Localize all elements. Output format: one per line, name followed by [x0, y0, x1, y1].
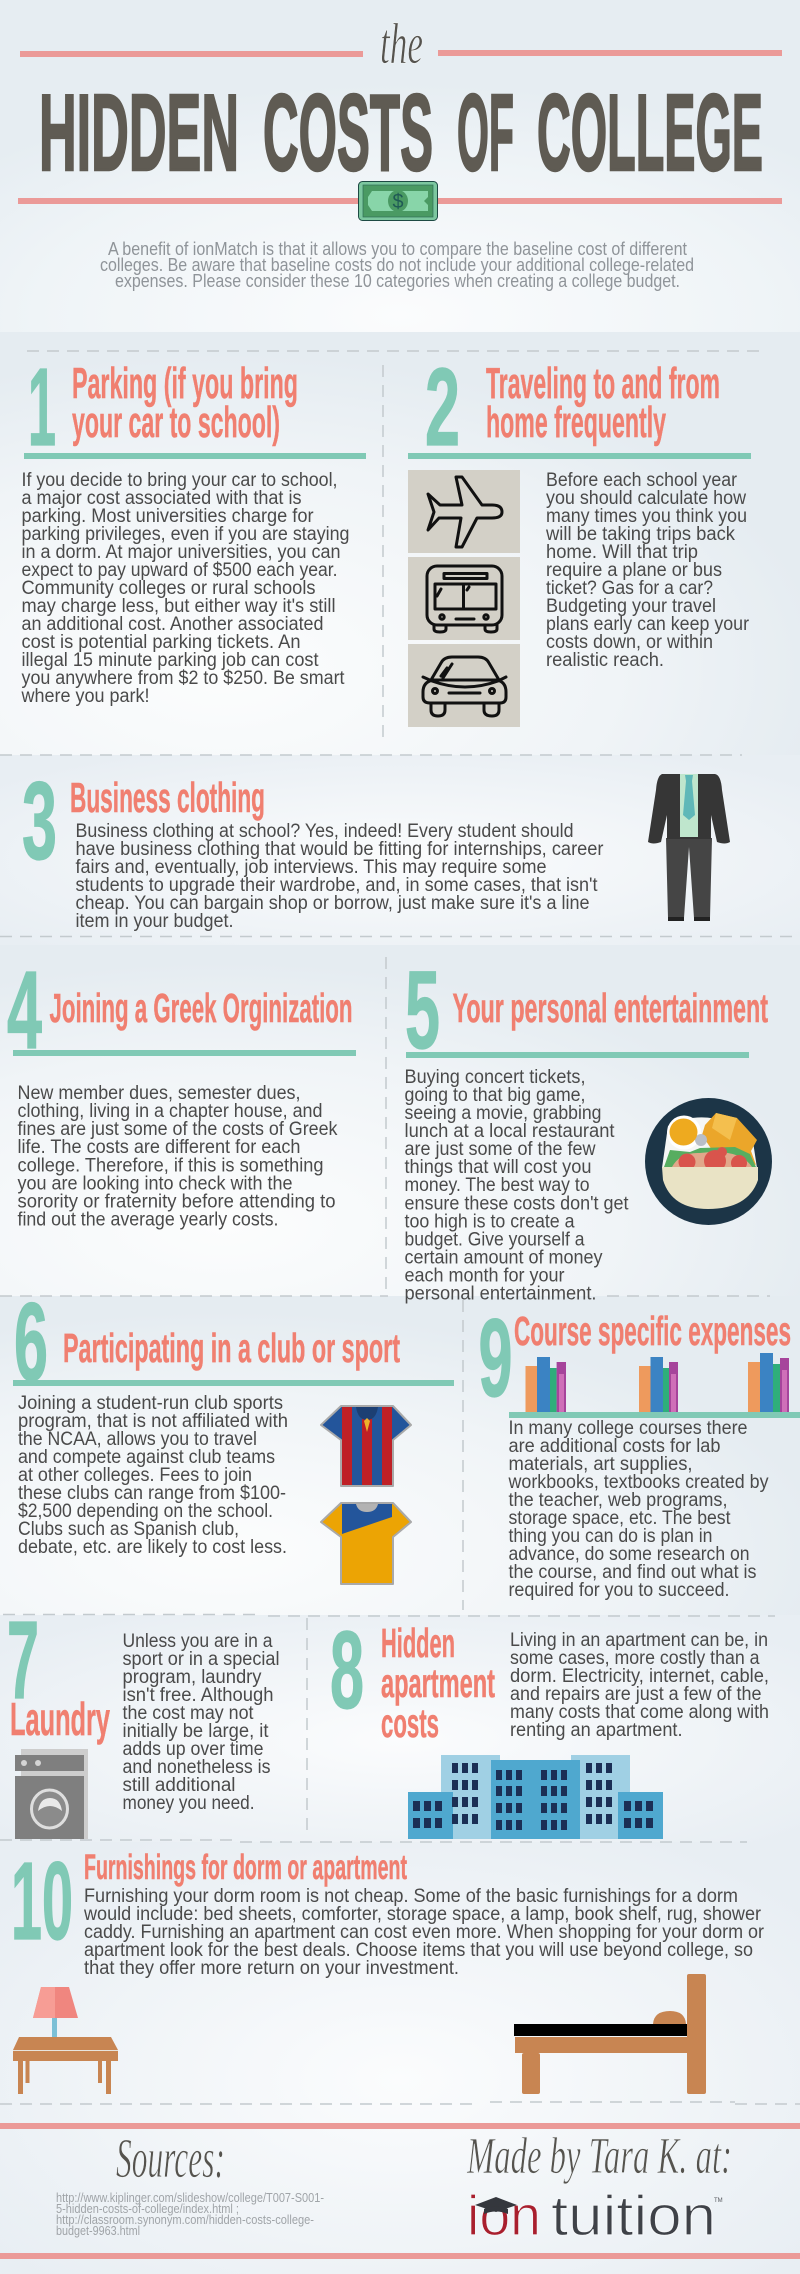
text: club body	[18, 1393, 288, 1558]
text: traveling body: ticket? Gas for a car?	[546, 578, 713, 599]
heading: traveling	[486, 359, 720, 447]
panel: 7 laundry	[7, 1599, 280, 1839]
heading: furnishings: Furnishings for dorm or apartment	[84, 1848, 407, 1887]
text: entertainment body	[404, 1067, 629, 1304]
icon: apartment buildings	[408, 1755, 663, 1839]
intro text: expenses. Please consider these 10 categories when creating a college budget.	[115, 270, 680, 291]
title	[39, 72, 763, 194]
text: course body: required for you to succeed.	[508, 1580, 730, 1601]
text: greek body: life. The costs are different for each	[18, 1137, 300, 1158]
text: entertainment body: seeing a movie, grabbing	[404, 1103, 602, 1124]
text: apartment body: renting an apartment.	[510, 1720, 682, 1741]
text: laundry body: and nonetheless is	[122, 1757, 270, 1778]
text: greek body	[18, 1083, 338, 1230]
logo: iontuition	[467, 2184, 723, 2248]
text: entertainment body: each month for your	[404, 1266, 565, 1286]
number 4: 4	[7, 949, 42, 1072]
sources links: http://www.kiplinger.com/slideshow/college/T007-S001-	[56, 2191, 324, 2205]
text: course body: materials, art supplies,	[508, 1454, 692, 1475]
text: course body: the teacher, web programs,	[508, 1490, 728, 1511]
text: parking body: an additional cost. Another associated	[22, 614, 324, 635]
text: apartment body: and repairs are just a few of the	[510, 1684, 762, 1705]
heading: apartment	[381, 1620, 495, 1746]
footer	[0, 2123, 800, 2259]
number 3: 3	[22, 760, 57, 883]
text: apartment body: some cases, more costly than a	[510, 1648, 760, 1669]
icon: bus	[408, 557, 520, 640]
text: club body: $2,500 depending on the school.	[18, 1501, 273, 1522]
number 2: 2	[425, 346, 460, 469]
icon: dollar bill: $	[392, 191, 404, 213]
text: parking body: illegal 15 minute parking job can cost	[22, 650, 319, 671]
text: greek body: fines are just some of the costs of Greek	[18, 1119, 338, 1140]
icon: striped jersey	[321, 1406, 411, 1486]
text: laundry body: the cost may not	[122, 1703, 254, 1724]
text: business clothing body: students to upgrade their wardrobe, and, in some cases, that isn't	[76, 875, 598, 896]
icon: lamp on table	[13, 1987, 118, 2094]
icon: plane	[408, 470, 520, 553]
number 8: 8	[330, 1609, 364, 1732]
heading: apartment: Hidden	[381, 1620, 455, 1666]
number 9: 9	[478, 1297, 512, 1420]
icon: car	[408, 644, 520, 727]
heading: greek: Joining a Greek Orginization	[50, 985, 352, 1031]
text: business clothing body: item in your budget.	[76, 911, 234, 932]
sources links: 5-hidden-costs-of-college/index.html ;	[56, 2202, 239, 2216]
panel: 2 traveling	[408, 346, 751, 727]
text: apartment body: many costs that come along with	[510, 1702, 769, 1723]
logo: iontuition: TM	[714, 2198, 723, 2204]
heading: parking: Parking (if you bring	[72, 359, 298, 408]
intro text: A benefit of ionMatch is that it allows you to compare the baseline cost of different	[108, 238, 687, 259]
text: traveling body: Before each school year	[546, 470, 738, 491]
sources links: http://classroom.synonym.com/hidden-costs-college-	[56, 2213, 314, 2227]
text: entertainment body: going to that big game,	[404, 1085, 586, 1106]
text: course body: are additional costs for lab	[508, 1436, 720, 1457]
text: apartment body	[510, 1630, 769, 1741]
text: entertainment body: money. The best way to	[404, 1175, 590, 1196]
script word: the: the	[380, 11, 423, 76]
text: parking body: where you park!	[21, 686, 150, 707]
text: laundry body: sport or in a special	[122, 1649, 280, 1670]
text: entertainment body: lunch at a local restaurant	[404, 1121, 615, 1142]
panel: 1 parking: 1	[28, 346, 56, 469]
text: business clothing body: have business clothing that would be fitting for internships, career	[76, 839, 604, 860]
sources links	[56, 2191, 324, 2238]
text: business clothing body	[76, 821, 604, 932]
text: furnishings body: caddy. Furnishing an apartment can cost even more. When shopping for your dorm or	[84, 1922, 765, 1943]
heading: apartment: apartment	[381, 1660, 495, 1706]
text: parking body: parking. Most universities charge for	[22, 506, 314, 527]
text: apartment body: dorm. Electricity, internet, cable,	[510, 1666, 769, 1687]
text: parking body: in a dorm. At major universities, you can	[22, 542, 340, 563]
text: parking body: If you decide to bring your car to school,	[22, 470, 338, 491]
panel: 10 furnishings	[11, 1840, 765, 2094]
text: entertainment body: budget. Give yourself a	[404, 1230, 585, 1250]
text: traveling body: realistic reach.	[546, 650, 664, 671]
header	[18, 11, 782, 291]
text: business clothing body: cheap. You can bargain shop or borrow, just make sure it's a line	[76, 893, 590, 914]
text: entertainment body: are just some of the few	[404, 1139, 596, 1160]
text: club body: and compete against club teams	[18, 1447, 275, 1468]
text: laundry body: program, laundry	[122, 1667, 262, 1688]
text: course body	[508, 1418, 769, 1601]
text: traveling body: home. Will that trip	[546, 542, 698, 563]
text: traveling body: will be taking trips back	[545, 524, 735, 545]
icon: dollar bill	[358, 182, 438, 220]
text: furnishings body: that they offer more return on your investment.	[84, 1958, 459, 1979]
title: HIDDEN	[39, 72, 239, 194]
text: business clothing body: fairs and, eventually, job interviews. This may require some	[76, 857, 546, 878]
heading: apartment: costs	[381, 1700, 439, 1746]
text: greek body: college. Therefore, if this is something	[18, 1156, 324, 1176]
icon: bed	[514, 1974, 706, 2094]
text: club body: program, that is not affiliated with	[18, 1411, 288, 1432]
text: club body: at other colleges. Fees to join	[18, 1465, 252, 1486]
text: traveling body: require a plane or bus	[546, 560, 722, 581]
text: club body: these clubs can range from $100-	[18, 1483, 286, 1504]
text: laundry body: adds up over time	[122, 1739, 264, 1760]
text: parking body	[21, 470, 350, 707]
text: entertainment body: too high is to create a	[404, 1212, 575, 1232]
number 6: 6	[14, 1281, 48, 1404]
panel: 1 parking	[21, 346, 366, 707]
text: traveling body: many times you think you	[546, 506, 747, 527]
number 7: 7	[7, 1599, 39, 1722]
panel: 5 personal entertainment	[404, 949, 772, 1304]
text: furnishings body: Furnishing your dorm room is not cheap. Some of the basic furnishings for a dorm	[84, 1886, 738, 1907]
text: greek body: find out the average yearly costs.	[18, 1210, 278, 1230]
text: laundry body: money you need.	[122, 1793, 254, 1814]
text: entertainment body: Buying concert tickets,	[404, 1067, 586, 1088]
text: business clothing body: Business clothing at school? Yes, indeed! Every student should	[76, 821, 574, 842]
text: course body: the course, and find out what is	[508, 1562, 756, 1583]
text: furnishings body	[83, 1886, 765, 1979]
heading: parking	[72, 359, 298, 447]
logo: iontuition: tuition	[551, 2184, 716, 2248]
text: course body: advance, do some research on	[508, 1544, 750, 1565]
sources heading: Sources:	[116, 2128, 225, 2190]
text: greek body: sorority or fraternity before attending to	[18, 1192, 336, 1212]
text: club body: debate, etc. are likely to cost less.	[18, 1537, 287, 1558]
heading: business clothing: Business clothing	[70, 774, 265, 821]
text: traveling body: costs down, or within	[546, 632, 713, 653]
sources links: budget-9963.html	[56, 2224, 140, 2238]
text: club body: Joining a student-run club sports	[18, 1393, 283, 1414]
text: course body: workbooks, textbooks created by	[508, 1472, 769, 1493]
text: entertainment body: personal entertainment.	[404, 1284, 596, 1304]
icon: washing machine	[15, 1749, 88, 1839]
number 5: 5	[405, 949, 440, 1072]
text: greek body: New member dues, semester dues,	[18, 1083, 300, 1104]
text: entertainment body: ensure these costs don't get	[404, 1194, 629, 1214]
title: COSTS	[263, 72, 433, 194]
text: traveling body: you should calculate how	[546, 488, 746, 509]
number 10: 10	[11, 1840, 73, 1963]
text: laundry body: Unless you are in a	[122, 1631, 273, 1652]
text: laundry body: still additional	[122, 1775, 236, 1796]
heading: parking: your car to school)	[72, 398, 280, 447]
icon: food plate	[645, 1098, 772, 1225]
text: parking body: parking privileges, even if you are staying	[22, 524, 350, 545]
heading: laundry: Laundry	[10, 1693, 110, 1745]
text: laundry body: initially be large, it	[122, 1721, 269, 1742]
text: laundry body	[122, 1631, 280, 1814]
text: club body: the NCAA, allows you to travel	[18, 1429, 257, 1450]
text: parking body: may charge less, but either way it's still	[22, 596, 336, 617]
text: entertainment body: certain amount of money	[404, 1248, 603, 1268]
text: parking body: Community colleges or rural schools	[22, 578, 316, 599]
text: apartment body: Living in an apartment can be, in	[510, 1630, 768, 1651]
text: traveling body	[545, 470, 750, 671]
text: greek body: clothing, living in a chapter house, and	[18, 1101, 322, 1122]
text: furnishings body: would include: bed sheets, comforter, storage space, a lamp, book shelf, rug, shower	[83, 1904, 762, 1925]
text: course body: storage space, etc. The best	[508, 1508, 731, 1529]
text: furnishings body: apartment look for the best deals. Choose items that you will use beyond college, so	[84, 1940, 753, 1961]
icon: suit	[648, 774, 730, 921]
text: laundry body: isn't free. Although	[122, 1685, 274, 1706]
heading: club: Participating in a club or sport	[63, 1325, 400, 1371]
text: parking body: a major cost associated with that is	[22, 488, 302, 509]
icon: yellow jersey	[321, 1503, 411, 1584]
text: traveling body: plans early can keep your	[546, 614, 750, 635]
text: parking body: cost is potential parking tickets. An	[22, 632, 300, 653]
panel: 3 business clothing	[22, 760, 730, 932]
panel: 9 course specific expenses	[478, 1297, 800, 1601]
panel: 6 club or sport	[13, 1281, 454, 1584]
panel: 8 hidden apartment costs	[330, 1609, 769, 1839]
intro text	[100, 238, 694, 291]
text: course body: thing you can do is plan in	[508, 1526, 712, 1547]
title: OF	[457, 72, 514, 194]
text: course body: In many college courses there	[508, 1418, 748, 1439]
text: greek body: you are looking into check with the	[18, 1174, 292, 1194]
panel: 4 greek organization	[7, 949, 356, 1230]
text: club body: Clubs such as Spanish club,	[18, 1519, 239, 1540]
text: traveling body: Budgeting your travel	[546, 596, 716, 617]
text: entertainment body: things that will cost you	[404, 1157, 592, 1178]
intro text: colleges. Be aware that baseline costs do not include your additional college-related	[100, 254, 694, 275]
text: parking body: you anywhere from $2 to $250. Be smart	[22, 668, 345, 689]
logo: iontuition: ion	[467, 2184, 541, 2248]
text: parking body: expect to pay upward of $500 each year.	[22, 560, 338, 581]
icon: books	[509, 1353, 800, 1418]
